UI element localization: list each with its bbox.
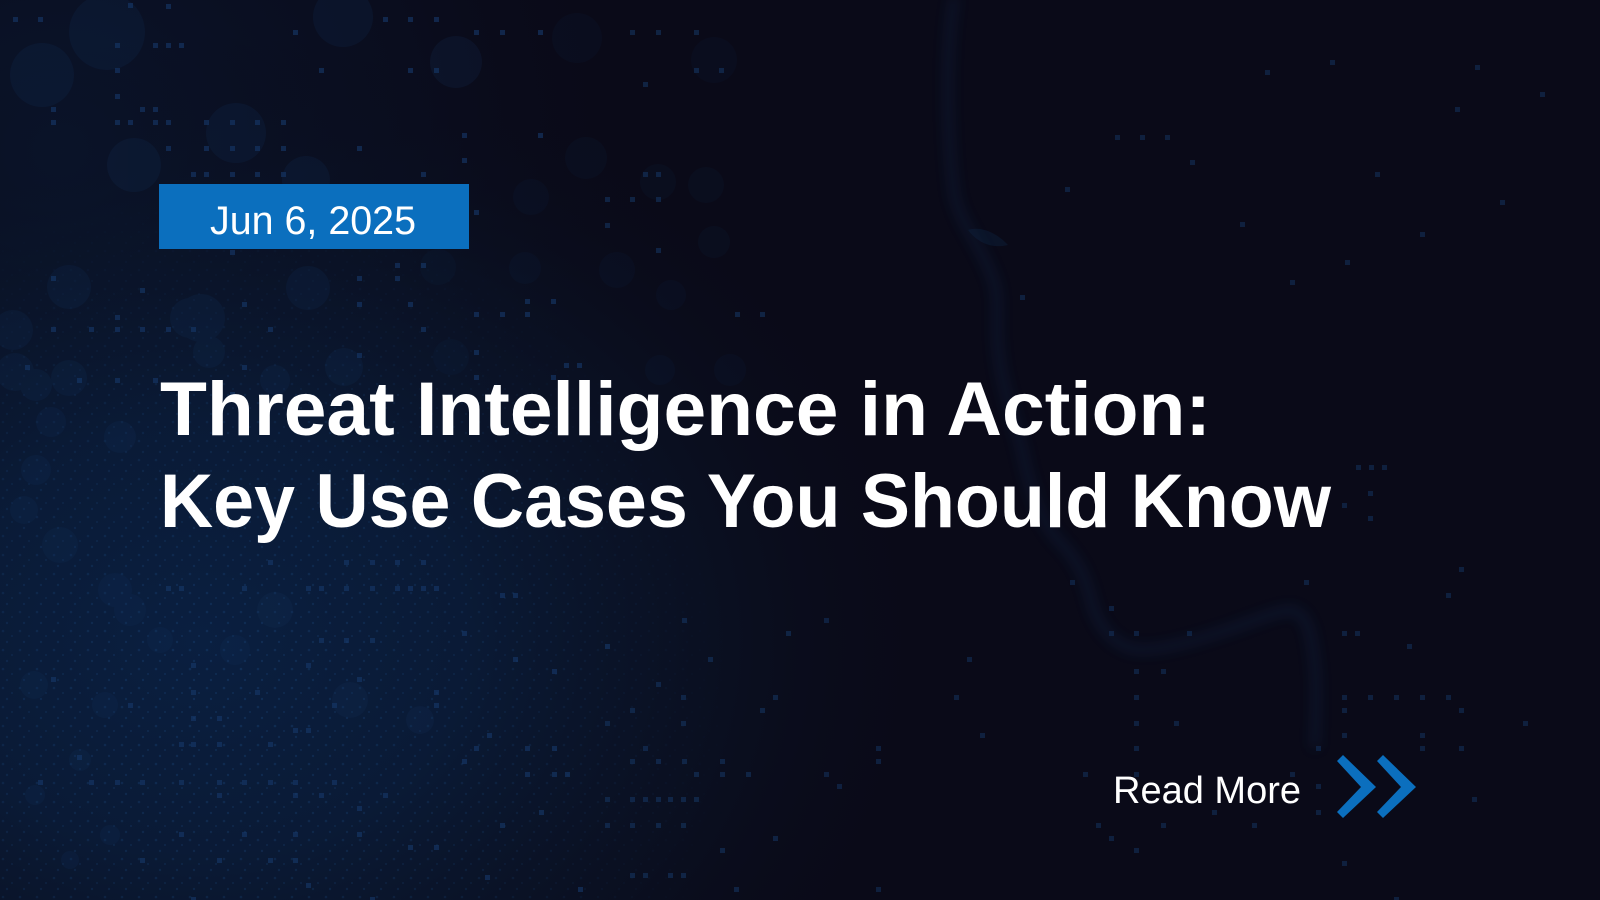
read more label: Read More <box>1113 770 1301 812</box>
date badge <box>159 184 469 249</box>
background: bokeh circles <box>0 0 746 869</box>
date badge: Jun 6, 2025 <box>210 199 416 243</box>
title: Key Use Cases You Should Know <box>160 459 1332 544</box>
title <box>160 367 1332 544</box>
background: faint face silhouette <box>948 0 1316 745</box>
background: dark navy gradient <box>0 0 731 900</box>
icon: double chevron arrow <box>1337 755 1416 818</box>
title: Threat Intelligence in Action: <box>160 367 1211 452</box>
